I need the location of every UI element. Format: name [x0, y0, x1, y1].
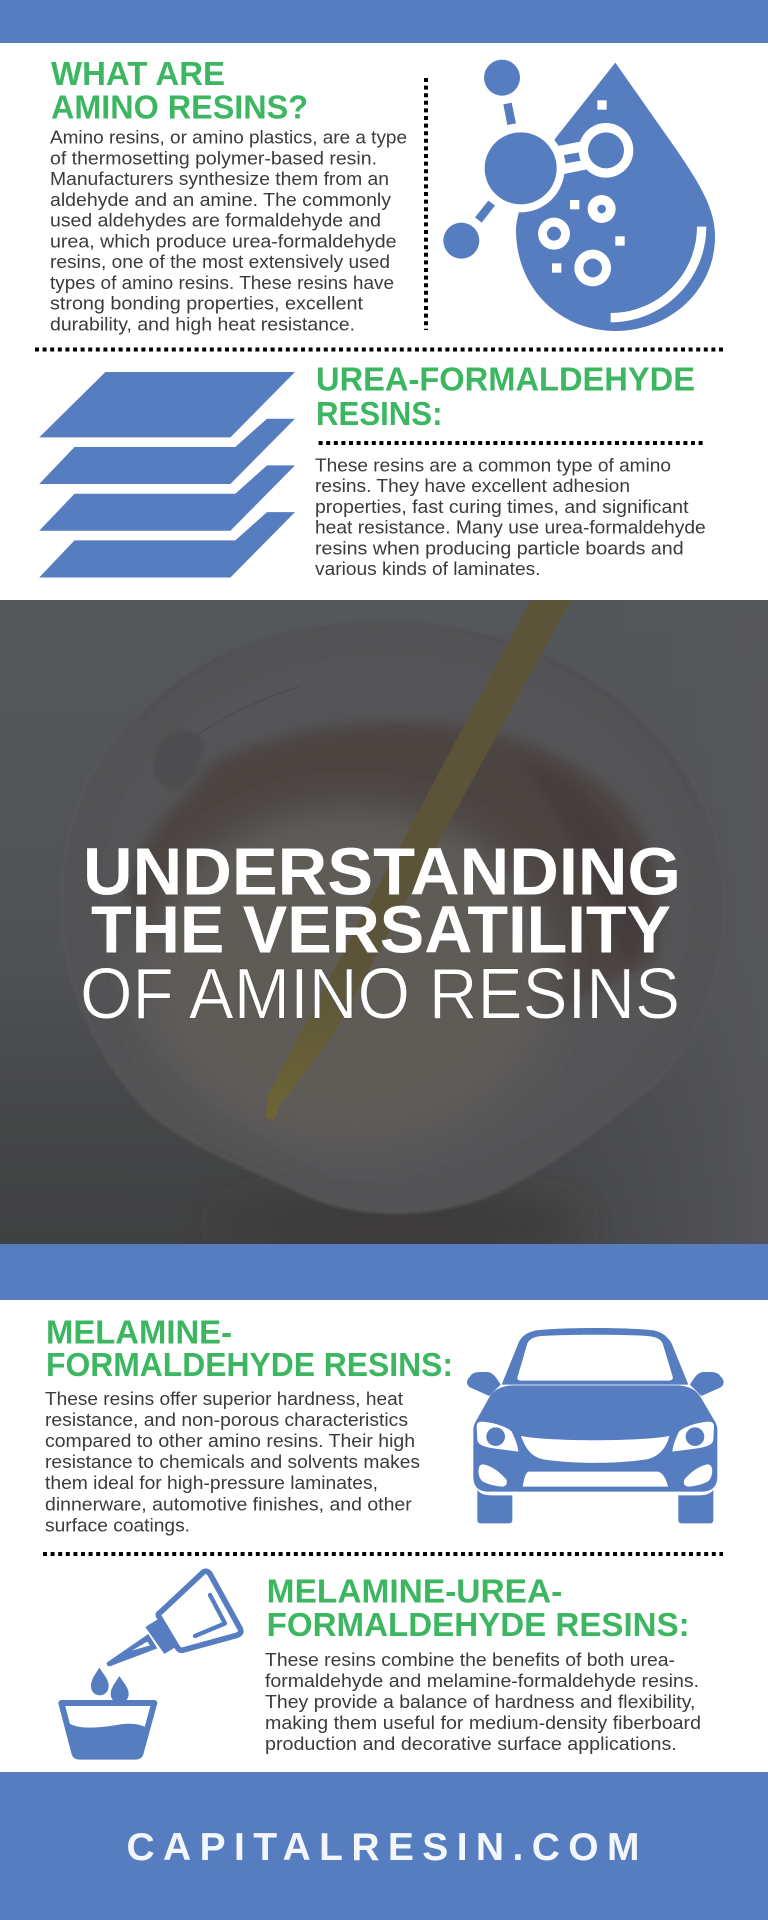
text block: melamine-formaldehyde description: compared to other amino resins. Their high	[45, 1430, 415, 1451]
title: OF AMINO RESINS	[80, 955, 680, 1035]
text block: amino resins description	[50, 126, 407, 334]
text block: melamine-formaldehyde description: resistance to chemicals and solvents makes	[45, 1451, 420, 1472]
icon: molecule and resin drop	[443, 60, 715, 331]
heading: what are amino resins: AMINO RESINS?	[51, 89, 308, 126]
icon: stacked laminate sheets	[39, 372, 295, 578]
text block: amino resins description: of thermosetting polymer-based resin.	[50, 147, 377, 168]
top banner	[0, 0, 768, 43]
text block: melamine-formaldehyde description: resistance, and non-porous characteristics	[45, 1409, 408, 1430]
blue band	[0, 1244, 768, 1300]
panel: melamine-urea-formaldehyde resins	[61, 1571, 701, 1759]
text block: urea-formaldehyde description	[315, 454, 706, 579]
panel: melamine-formaldehyde resins	[45, 1314, 724, 1535]
hero panel: photo of resin cup with title	[0, 600, 768, 1255]
text block: melamine-urea-formaldehyde description: making them useful for medium-density fiberboard	[265, 1712, 701, 1733]
heading: melamine-urea-formaldehyde resins: MELAMINE-UREA-	[267, 1572, 562, 1610]
text block: melamine-urea-formaldehyde description: formaldehyde and melamine-formaldehyde resins.	[265, 1670, 699, 1691]
text block: melamine-urea-formaldehyde description: They provide a balance of hardness and flexibility,	[265, 1691, 695, 1712]
icon: car front view	[467, 1328, 724, 1523]
title: THE VERSATILITY	[91, 893, 671, 968]
photo: mixing cup with stick	[0, 600, 768, 1255]
panel: what are amino resins	[50, 55, 715, 334]
text block: amino resins description: used aldehydes are formaldehyde and	[50, 210, 381, 230]
title	[80, 835, 681, 1035]
title: UNDERSTANDING	[83, 835, 681, 910]
heading: melamine-formaldehyde resins	[46, 1314, 453, 1383]
text block: urea-formaldehyde description: heat resistance. Many use urea-formaldehyde	[315, 517, 706, 538]
heading: melamine-formaldehyde resins: FORMALDEHYDE RESINS:	[46, 1346, 453, 1383]
text block: melamine-formaldehyde description: them ideal for high-pressure laminates,	[45, 1472, 378, 1493]
text block: melamine-formaldehyde description: These resins offer superior hardness, heat	[45, 1388, 404, 1409]
text block: amino resins description: Manufacturers synthesize them from an	[50, 168, 389, 189]
website url: CAPITALRESIN.COM	[126, 1826, 640, 1869]
heading: urea-formaldehyde resins: RESINS:	[316, 395, 442, 432]
heading: urea-formaldehyde resins	[316, 360, 695, 432]
text block: amino resins description: urea, which produce urea-formaldehyde	[50, 230, 397, 251]
text block: melamine-urea-formaldehyde description	[265, 1649, 701, 1754]
icon: bottle pouring drops into bowl	[61, 1571, 241, 1759]
footer band	[0, 1772, 768, 1920]
text block: urea-formaldehyde description: various kinds of laminates.	[315, 558, 540, 579]
text block: melamine-formaldehyde description	[45, 1388, 420, 1535]
text block: amino resins description: types of amino resins. These resins have	[50, 272, 394, 293]
text block: urea-formaldehyde description: properties, fast curing times, and significant	[315, 496, 689, 517]
text block: melamine-formaldehyde description: dinnerware, automotive finishes, and other	[45, 1493, 412, 1514]
text block: melamine-urea-formaldehyde description: These resins combine the benefits of both urea-	[265, 1649, 675, 1670]
text block: amino resins description: aldehyde and an amine. The commonly	[50, 189, 392, 210]
text block: urea-formaldehyde description: resins. They have excellent adhesion	[315, 475, 630, 496]
heading: melamine-formaldehyde resins: MELAMINE-	[46, 1314, 232, 1350]
text block: melamine-formaldehyde description: surface coatings.	[45, 1514, 190, 1535]
heading: urea-formaldehyde resins: UREA-FORMALDEHYDE	[316, 360, 695, 397]
heading: melamine-urea-formaldehyde resins: FORMALDEHYDE RESINS:	[267, 1606, 690, 1643]
text block: amino resins description: durability, and high heat resistance.	[50, 313, 355, 334]
text block: urea-formaldehyde description: These resins are a common type of amino	[315, 454, 671, 476]
heading: what are amino resins	[51, 55, 308, 126]
text block: melamine-urea-formaldehyde description: production and decorative surface applications.	[265, 1733, 677, 1754]
text block: amino resins description: Amino resins, or amino plastics, are a type	[50, 126, 407, 148]
panel: urea-formaldehyde resins	[39, 360, 706, 579]
heading: melamine-urea-formaldehyde resins	[267, 1572, 690, 1643]
text block: amino resins description: strong bonding properties, excellent	[50, 292, 364, 314]
text block: amino resins description: resins, one of the most extensively used	[50, 251, 390, 272]
text block: urea-formaldehyde description: resins when producing particle boards and	[315, 538, 684, 558]
heading: what are amino resins: WHAT ARE	[51, 55, 225, 92]
